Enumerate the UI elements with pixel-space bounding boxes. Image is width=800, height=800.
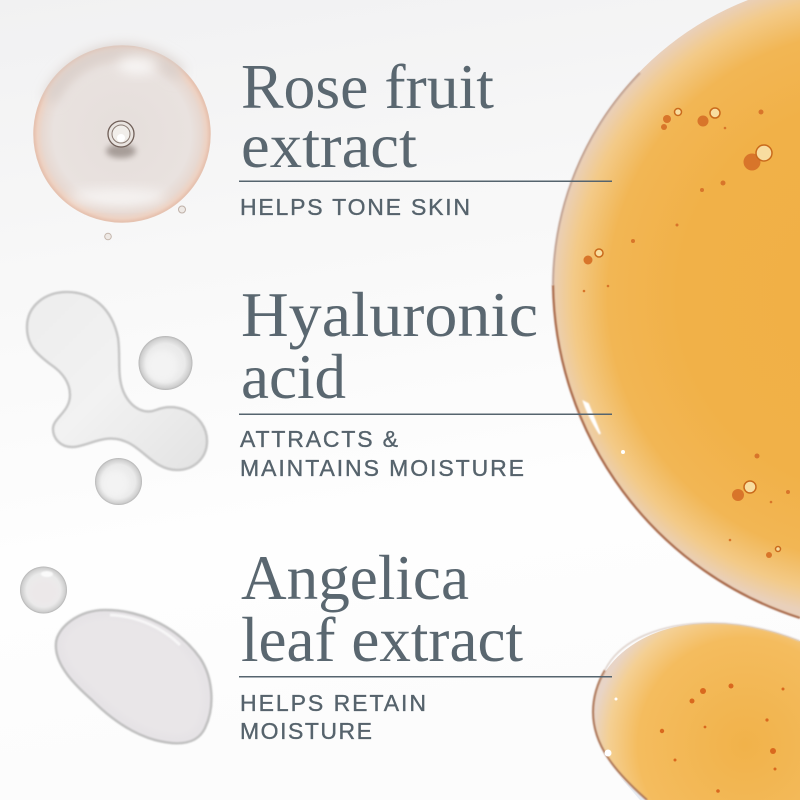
heading: Angelica leaf extract — [241, 542, 523, 675]
heading: Angelica leaf extract: leaf extract — [241, 604, 523, 675]
icon: angelica droplet and oval drop — [20, 566, 211, 743]
text: helps tone skin: HELPS TONE SKIN — [240, 194, 470, 220]
text: attracts and maintains moisture: ATTRACTS & — [240, 426, 398, 452]
text: attracts and maintains moisture — [240, 426, 524, 481]
heading: Rose fruit extract: Rose fruit — [241, 51, 494, 122]
heading: Hyaluronic acid: acid — [241, 341, 346, 412]
divider line: angelica — [239, 676, 612, 678]
text: helps retain moisture: HELPS RETAIN — [240, 690, 426, 716]
heading: Angelica leaf extract: Angelica — [241, 542, 469, 613]
text: helps retain moisture: MOISTURE — [240, 718, 372, 744]
icon: small golden oil drop — [593, 623, 800, 800]
divider line: rose fruit — [239, 180, 612, 182]
icon: rose fruit extract drop — [34, 46, 210, 240]
icon: large golden oil drop — [553, 0, 800, 618]
divider line: hyaluronic acid — [239, 414, 612, 415]
heading: Hyaluronic acid — [241, 279, 538, 412]
icon: hyaluronic acid blob and droplets — [27, 292, 207, 505]
heading: Rose fruit extract — [241, 51, 494, 181]
text: helps retain moisture — [240, 690, 426, 744]
text: attracts and maintains moisture: MAINTAINS MOISTURE — [240, 455, 524, 481]
heading: Rose fruit extract: extract — [241, 110, 417, 181]
heading: Hyaluronic acid: Hyaluronic — [241, 279, 538, 350]
